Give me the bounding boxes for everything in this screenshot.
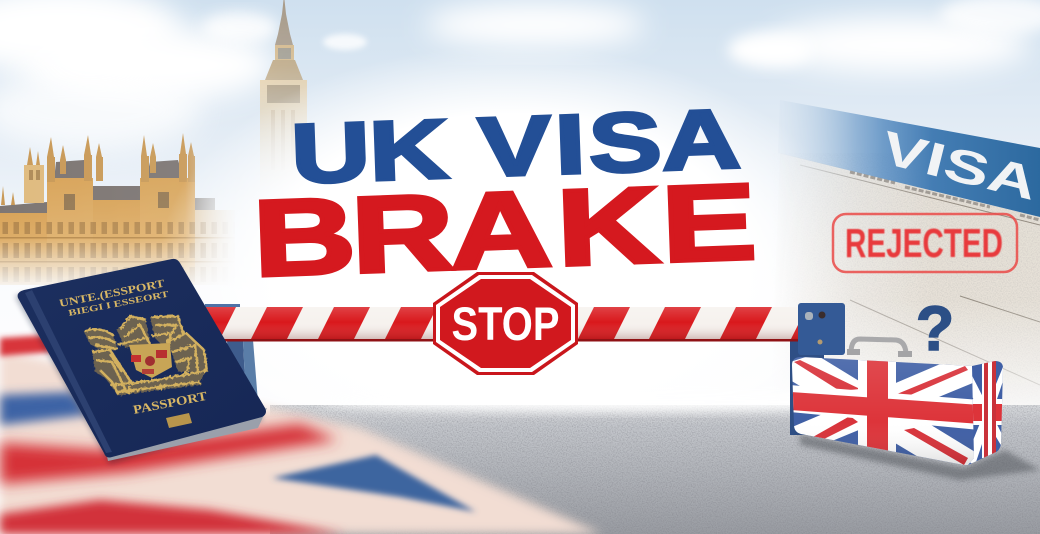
paper page [791,158,1040,405]
passport heading: BIEGI I ESSEORT [67,289,170,318]
white centre glow [160,45,860,475]
right barrier post [790,303,845,435]
stone facade [0,213,47,285]
Houses of Parliament [0,133,235,285]
title line 2: BRAKE [251,161,758,299]
windows [0,222,235,285]
passport [15,259,267,464]
VISA label: VISA [877,120,1040,210]
roofs [0,160,215,216]
union flag foreground [0,335,602,534]
handle [851,339,906,353]
shadow [800,434,1040,480]
Big Ben tower [260,0,307,166]
passport heading [58,278,170,318]
front flag panel [792,357,974,466]
stop label: STOP [452,297,560,350]
union jack suitcase [790,339,1040,480]
coat of arms [83,316,207,396]
question mark: ? [916,294,954,364]
visa document [783,102,1040,405]
left barrier post [205,304,258,402]
grey road [270,392,1040,534]
rejected stamp [833,214,1017,272]
passport heading: UNTE.(ESSPORT [58,278,166,310]
stop sign [433,272,578,375]
side flag panel [968,361,1003,465]
biometric chip [166,413,192,428]
blue visa band [778,100,1040,217]
crest shield [129,343,172,378]
visa printed lines [850,172,1040,220]
spires [1,133,195,205]
title [251,91,758,299]
passport label: PASSPORT [132,389,209,417]
clouds [0,0,1040,150]
title line 1: UK VISA [288,91,742,201]
striped barrier arm [205,307,798,342]
